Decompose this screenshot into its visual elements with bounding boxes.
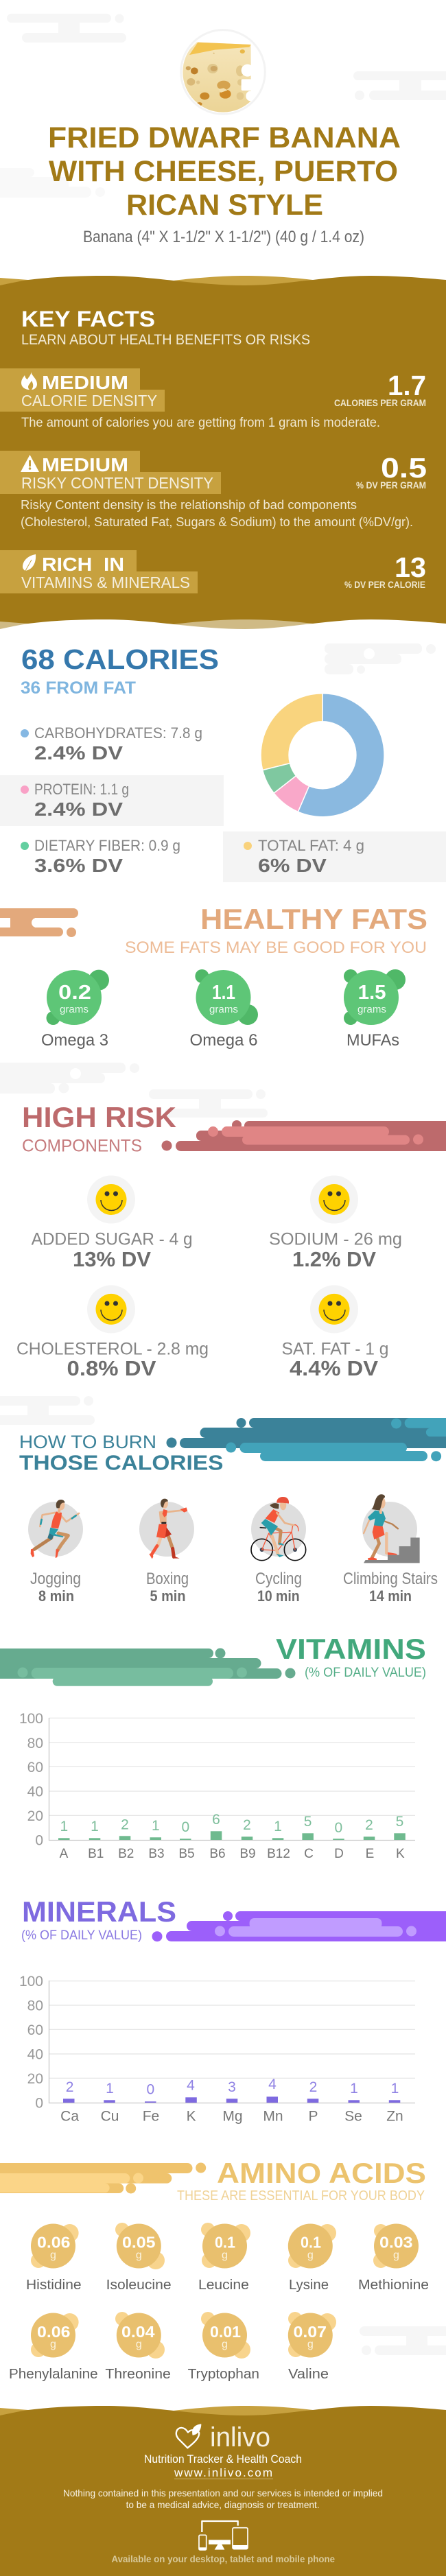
stat: omega 6: 1.1: [212, 982, 235, 1004]
disclaimer: Nothing contained in this presentation and our services is intended or implied: [63, 2488, 383, 2498]
stat: histidine: [26, 2224, 82, 2293]
heading: healthy fats: HEALTHY FATS: [200, 903, 427, 935]
bar chart: minerals: 2: [66, 2079, 73, 2095]
stat: MUFAs: MUFAs: [347, 1031, 399, 1050]
activity: cycling: 10 min: [257, 1587, 300, 1605]
bar chart: minerals: 80: [27, 1998, 43, 2014]
item: sodium: 1.2% DV: [292, 1247, 376, 1271]
bar chart: vitamins: 20: [27, 1808, 43, 1824]
bar chart: minerals: 1: [391, 2081, 399, 2096]
title: WITH CHEESE, PUERTO: [49, 155, 398, 188]
legend: dietary fiber: DIETARY FIBER: 0.9 g: [34, 837, 180, 854]
activity: boxing: [139, 1499, 194, 1605]
website link: www.inlivo.com: [174, 2466, 272, 2479]
stat: omega 3: Omega 3: [41, 1031, 108, 1050]
subheading: vitamins: (% OF DAILY VALUE): [305, 1666, 426, 1680]
stat: valine: Valine: [288, 2367, 329, 2382]
bar chart: vitamins: C: [304, 1847, 314, 1861]
activity: boxing: 5 min: [150, 1587, 185, 1605]
bar chart: minerals: K: [187, 2109, 196, 2125]
bar chart: vitamins: A: [60, 1847, 69, 1861]
stat: methionine: g: [393, 2249, 399, 2261]
bar chart: minerals: Mn: [263, 2109, 283, 2125]
bar chart: vitamins: [19, 1711, 415, 1861]
subheading: healthy fats: SOME FATS MAY BE GOOD FOR YOU: [125, 938, 427, 957]
bar chart: minerals: 100: [19, 1974, 43, 1989]
stat: phenylalanine: 0.06: [37, 2323, 70, 2341]
bar chart: minerals: 1: [106, 2081, 114, 2096]
panel: vitamins: [0, 1633, 426, 1861]
item: cholesterol: CHOLESTEROL - 2.8 mg: [16, 1339, 209, 1358]
stat: leucine: Leucine: [198, 2278, 249, 2293]
icon: stair climber: [364, 1494, 420, 1563]
stat: methionine: [358, 2224, 429, 2293]
fact: calorie density: MEDIUM: [42, 372, 128, 393]
item: cholesterol: 0.8% DV: [67, 1356, 156, 1380]
bar chart: vitamins: B6: [209, 1847, 226, 1861]
activity: climbing stairs: [343, 1494, 438, 1605]
stat: lysine: 0.1: [301, 2234, 321, 2252]
item: added sugar: 13% DV: [73, 1247, 151, 1271]
bar chart: minerals: 4: [187, 2078, 195, 2094]
icon: cheese wedge: [180, 30, 265, 117]
bar chart: vitamins: 40: [27, 1784, 43, 1800]
bar chart: vitamins: E: [366, 1847, 374, 1861]
icon: flame: [21, 372, 37, 390]
fact: risky content density: Risky Content density is the relationship of bad components: [21, 498, 357, 512]
stat: isoleucine: 0.05: [122, 2234, 156, 2252]
header: [48, 30, 401, 246]
bar chart: vitamins: 0: [181, 1819, 189, 1835]
subheading: calories from fat: 36 FROM FAT: [21, 678, 136, 698]
fact: risky content density: % DV PER GRAM: [356, 480, 426, 491]
legend: total fat: 6% DV: [258, 855, 327, 876]
bar chart: minerals: 3: [228, 2079, 236, 2095]
donut chart: macronutrient split: [261, 694, 384, 817]
bar chart: vitamins: B9: [239, 1847, 256, 1861]
bar chart: vitamins: 0: [35, 1833, 43, 1848]
fact: risky content density: 0.5: [381, 452, 427, 484]
item: added sugar: ADDED SUGAR - 4 g: [32, 1229, 193, 1249]
bar chart: vitamins: 0: [335, 1820, 342, 1836]
activity: climbing stairs: 14 min: [369, 1587, 412, 1605]
bar chart: minerals: 40: [27, 2047, 43, 2062]
bar chart: minerals: Fe: [143, 2109, 159, 2125]
stat: leucine: 0.1: [215, 2234, 235, 2252]
bar chart: vitamins: B2: [118, 1847, 134, 1861]
legend: dietary fiber: [21, 837, 180, 876]
panel: footer: [0, 2406, 446, 2576]
bar chart: vitamins: 1: [60, 1819, 68, 1834]
icon: warning triangle: [21, 455, 39, 472]
stat: MUFAs: [344, 969, 406, 1050]
icon: cyclist: [251, 1497, 306, 1561]
activity: jogging: [28, 1500, 83, 1605]
fact: rich in vitamins and minerals: [0, 550, 426, 593]
stat: omega 6: grams: [209, 1004, 238, 1015]
activity: jogging: 8 min: [38, 1587, 74, 1605]
heading: key facts: KEY FACTS: [21, 307, 155, 331]
stat: threonine: Threonine: [105, 2367, 171, 2382]
bar chart: minerals: P: [308, 2109, 318, 2125]
bar chart: vitamins: B1: [88, 1847, 104, 1861]
stat: methionine: 0.03: [379, 2234, 413, 2252]
stat: tryptophan: [188, 2312, 259, 2382]
fact: rich in vitamins and minerals: % DV PER CALORIE: [344, 579, 425, 590]
logo: inlivo heart and leaf: [176, 2424, 201, 2448]
item: saturated fat: 4.4% DV: [290, 1356, 378, 1380]
stat: omega 3: 0.2: [58, 982, 91, 1004]
stat: threonine: g: [136, 2339, 142, 2350]
stat: threonine: [105, 2312, 171, 2382]
bar chart: vitamins: 80: [27, 1736, 43, 1751]
stat: lysine: [288, 2224, 336, 2293]
legend: carbohydrates: [21, 724, 202, 764]
bar chart: minerals: 2: [309, 2079, 317, 2095]
panel: amino acids: [0, 2157, 429, 2382]
caption: availability: Available on your desktop, tablet and mobile phone: [111, 2553, 335, 2564]
stat: omega 3: [41, 970, 109, 1050]
fact: rich in vitamins and minerals: RICH IN: [42, 554, 124, 575]
bar chart: minerals: 60: [27, 2022, 43, 2038]
bar chart: vitamins: 60: [27, 1760, 43, 1775]
legend: total fat: TOTAL FAT: 4 g: [258, 837, 364, 854]
bar chart: minerals: Cu: [101, 2109, 119, 2125]
legend: protein: PROTEIN: 1.1 g: [34, 781, 129, 798]
stat: phenylalanine: Phenylalanine: [9, 2367, 98, 2382]
stat: MUFAs: grams: [357, 1004, 386, 1015]
bar chart: vitamins: B3: [148, 1847, 165, 1861]
bar chart: minerals: 0: [146, 2082, 154, 2098]
activity: cycling: [251, 1497, 306, 1605]
legend: dietary fiber: 3.6% DV: [34, 855, 123, 876]
item: cholesterol: [16, 1285, 209, 1380]
stat: histidine: Histidine: [26, 2278, 82, 2293]
heading: minerals: MINERALS: [22, 1895, 176, 1928]
item: sodium: SODIUM - 26 mg: [269, 1229, 402, 1249]
bar chart: vitamins: K: [396, 1847, 405, 1861]
bar chart: vitamins: 1: [91, 1819, 99, 1834]
item: sodium: [269, 1176, 402, 1271]
bar chart: vitamins: 1: [152, 1818, 160, 1834]
stat: omega 6: Omega 6: [189, 1031, 258, 1050]
fact: risky content density: RISKY CONTENT DENSITY: [21, 474, 213, 492]
bar chart: vitamins: 5: [396, 1814, 403, 1830]
bar chart: vitamins: 5: [304, 1814, 312, 1830]
bar chart: vitamins: 1: [274, 1819, 282, 1834]
bar chart: vitamins: D: [334, 1847, 344, 1861]
subheading: amino acids: THESE ARE ESSENTIAL FOR YOUR BODY: [177, 2188, 425, 2203]
panel: calories: [0, 643, 446, 882]
legend: protein: [0, 775, 224, 826]
fact: calorie density: CALORIES PER GRAM: [334, 397, 426, 408]
heading: vitamins: VITAMINS: [276, 1633, 426, 1665]
logo: inlivo wordmark: inlivo: [210, 2422, 270, 2453]
bar chart: vitamins: B12: [267, 1847, 290, 1861]
stat: leucine: [198, 2223, 250, 2293]
bar chart: vitamins: 2: [121, 1817, 129, 1833]
stat: lysine: Lysine: [289, 2278, 329, 2293]
panel: minerals: [19, 1895, 446, 2125]
stat: histidine: 0.06: [37, 2234, 70, 2252]
title: RICAN STYLE: [126, 189, 323, 222]
fact: calorie density: The amount of calories you are getting from 1 gram is moderate.: [21, 416, 380, 430]
icon: boxer: [149, 1499, 187, 1559]
title: [48, 121, 401, 222]
bar chart: minerals: 1: [350, 2081, 358, 2096]
stat: methionine: Methionine: [358, 2278, 429, 2293]
stat: histidine: g: [50, 2249, 56, 2261]
stat: tryptophan: g: [222, 2339, 228, 2350]
bar chart: minerals: 0: [35, 2095, 43, 2112]
legend: carbohydrates: CARBOHYDRATES: 7.8 g: [34, 724, 202, 742]
legend: protein: 2.4% DV: [34, 799, 123, 820]
item: saturated fat: [281, 1285, 388, 1380]
heading: how to burn: HOW TO BURN: [19, 1432, 156, 1452]
fact: calorie density: [0, 368, 426, 430]
stat: tryptophan: Tryptophan: [188, 2367, 259, 2382]
bar chart: minerals: 4: [268, 2077, 277, 2092]
stat: lysine: g: [307, 2249, 314, 2261]
panel: how to burn those calories: [19, 1418, 446, 1605]
fact: rich in vitamins and minerals: VITAMINS & MINERALS: [21, 574, 190, 591]
bar chart: vitamins: 2: [243, 1817, 251, 1833]
stat: threonine: 0.04: [121, 2323, 155, 2341]
title: FRIED DWARF BANANA: [48, 121, 401, 154]
stat: omega 6: [189, 969, 258, 1050]
stat: leucine: g: [222, 2249, 228, 2261]
bar chart: minerals: Se: [344, 2109, 362, 2125]
heading: amino acids: AMINO ACIDS: [217, 2157, 426, 2189]
stat: valine: g: [307, 2339, 314, 2350]
heading: those calories: THOSE CALORIES: [19, 1451, 224, 1475]
bar chart: minerals: Mg: [222, 2109, 243, 2125]
icon: leaf: [23, 554, 36, 571]
subheading: components: COMPONENTS: [22, 1137, 142, 1156]
stat: phenylalanine: [9, 2313, 98, 2382]
panel: key facts: [0, 276, 446, 638]
fact: risky content density: [0, 451, 427, 529]
stat: MUFAs: 1.5: [358, 982, 386, 1004]
bar chart: vitamins: 2: [365, 1817, 373, 1833]
subheading: minerals: (% OF DAILY VALUE): [21, 1928, 142, 1943]
stat: valine: [288, 2312, 336, 2382]
panel: healthy fats: [0, 903, 427, 1050]
icon: desktop, tablet and phone: [199, 2521, 248, 2550]
stat: valine: 0.07: [294, 2323, 327, 2341]
stat: isoleucine: [106, 2223, 172, 2293]
stat: isoleucine: g: [136, 2249, 142, 2261]
bar chart: minerals: Ca: [60, 2109, 79, 2125]
activity: boxing: Boxing: [146, 1570, 189, 1588]
subheading: key facts: LEARN ABOUT HEALTH BENEFITS OR RISKS: [21, 332, 310, 348]
fact: calorie density: 1.7: [388, 370, 426, 401]
legend: total fat: [223, 831, 446, 882]
heading: high risk: HIGH RISK: [22, 1101, 176, 1133]
bar chart: minerals: 20: [27, 2071, 43, 2087]
stat: isoleucine: Isoleucine: [106, 2278, 172, 2293]
item: saturated fat: SAT. FAT - 1 g: [281, 1339, 388, 1358]
stat: omega 3: grams: [60, 1004, 89, 1015]
bar chart: minerals: Zn: [386, 2109, 403, 2125]
legend: carbohydrates: 2.4% DV: [34, 742, 123, 764]
bar chart: minerals: [19, 1974, 415, 2125]
fact: calorie density: CALORIE DENSITY: [21, 392, 157, 410]
bar chart: vitamins: 100: [19, 1711, 43, 1727]
stat: tryptophan: 0.01: [210, 2323, 241, 2341]
stat: phenylalanine: g: [50, 2339, 56, 2350]
heading: calories: 68 CALORIES: [21, 643, 219, 675]
bar chart: vitamins: B5: [178, 1847, 195, 1861]
icon: jogger: [31, 1500, 79, 1558]
item: added sugar: [32, 1176, 193, 1271]
activity: cycling: Cycling: [255, 1570, 302, 1588]
fact: rich in vitamins and minerals: 13: [395, 552, 426, 583]
disclaimer: [63, 2488, 383, 2510]
activity: jogging: Jogging: [30, 1570, 81, 1588]
fact: risky content density: (Cholesterol, Saturated Fat, Sugars & Sodium) to the amount (%DV/gr).: [21, 515, 413, 529]
subtitle: serving size: Banana (4" X 1-1/2" X 1-1/2") (40 g / 1.4 oz): [83, 228, 364, 246]
fact: risky content density: MEDIUM: [42, 454, 128, 475]
tagline: Nutrition Tracker & Health Coach: [144, 2453, 302, 2466]
panel: high risk components: [16, 1101, 446, 1380]
bar chart: vitamins: 6: [212, 1812, 220, 1828]
disclaimer: to be a medical advice, diagnosis or treatment.: [126, 2499, 320, 2510]
